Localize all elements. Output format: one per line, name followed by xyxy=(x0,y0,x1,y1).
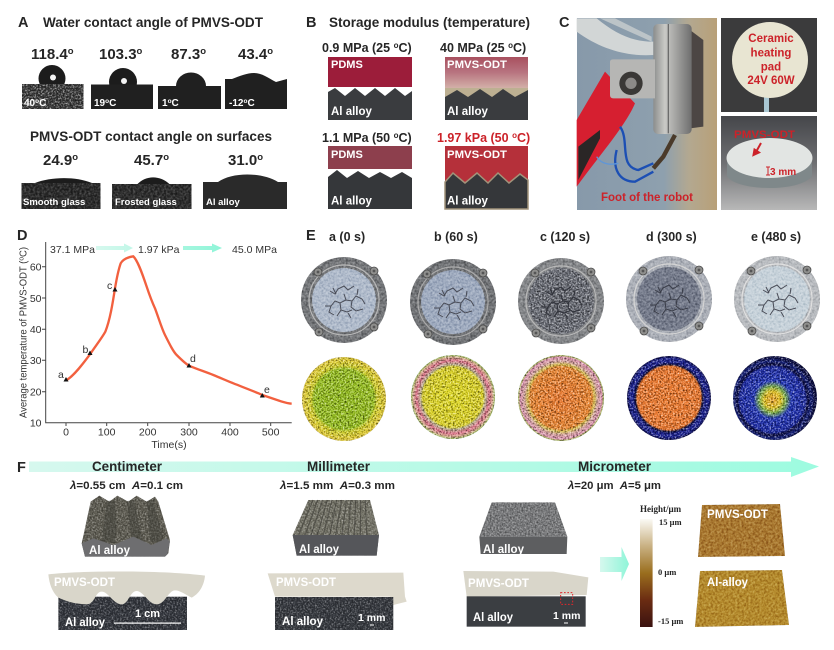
micrometer cross section: 1 mm xyxy=(553,610,580,622)
panel letter B: B xyxy=(306,15,316,31)
height colour bar: 15 μm xyxy=(659,517,682,527)
scale headings: Micrometer xyxy=(578,459,652,474)
thermal map e xyxy=(733,356,817,440)
panel D: temperature curve xyxy=(17,228,292,451)
contact angle values by temperature: 87.3 xyxy=(171,46,200,63)
droplet on frosted glass: Frosted glass xyxy=(115,197,177,208)
foot photo e xyxy=(734,256,820,342)
droplet image 1 C xyxy=(158,72,221,109)
droplet image 19 C: 19 xyxy=(94,98,105,109)
PMVS-ODT sample at 50 C xyxy=(437,131,530,209)
contact angle values by surface xyxy=(43,152,263,169)
line chart axes: 30 xyxy=(30,355,42,367)
micrometer cross section xyxy=(463,571,588,627)
droplet on frosted glass xyxy=(112,177,192,209)
panel F: multiscale surfaces xyxy=(17,457,819,630)
surface map PMVS-ODT: PMVS-ODT xyxy=(707,509,768,521)
centimeter block: Al alloy xyxy=(89,545,131,557)
droplet on Al alloy xyxy=(203,174,287,209)
height colour bar xyxy=(640,504,683,627)
contact angle values by temperature: 118.4 xyxy=(31,46,68,63)
PDMS sample at 50 C: C) xyxy=(398,131,412,145)
contact angle values by temperature: 103.3 xyxy=(99,46,137,63)
line chart axes: 60 xyxy=(30,262,42,274)
PMVS-ODT sample at 50 C: o xyxy=(512,131,517,140)
PDMS sample at 25 C: PDMS xyxy=(331,59,363,71)
contact angle values by temperature: o xyxy=(137,46,143,57)
PDMS sample at 50 C: o xyxy=(394,131,399,140)
thermal map c xyxy=(518,355,604,441)
foot photo d xyxy=(626,256,712,342)
line chart axes: C) xyxy=(18,247,30,257)
millimeter cross section xyxy=(268,573,407,630)
droplet image 1 C: C xyxy=(172,98,179,109)
data markers a to e: e xyxy=(264,384,270,396)
data markers a to e: c xyxy=(107,280,112,292)
photo: ceramic heating pad xyxy=(721,18,817,112)
millimeter block xyxy=(293,500,379,556)
micrometer cross section: Al alloy xyxy=(473,612,514,624)
photo: PMVS-ODT coated pad: 3 mm xyxy=(770,167,796,178)
foot photo b xyxy=(410,259,496,345)
PDMS sample at 50 C: 1.1 MPa (50 xyxy=(322,131,390,145)
time labels: a (0 s) xyxy=(329,230,365,244)
PMVS-ODT sample at 25 C: 40 MPa (25 xyxy=(440,41,505,55)
panel A: water contact angle xyxy=(18,15,287,209)
scale bar xyxy=(564,622,568,624)
heading: storage modulus: Storage modulus (temperature) xyxy=(329,15,530,30)
contact angle values by surface: 31.0 xyxy=(228,152,257,169)
modulus change annotations: 45.0 MPa xyxy=(232,244,277,256)
PDMS sample at 25 C xyxy=(322,41,412,120)
centimeter cross section: PMVS-ODT xyxy=(54,577,115,589)
wavelength and amplitude labels: λ=1.5 mm A=0.3 mm xyxy=(279,480,395,492)
droplet image 19 C: C xyxy=(109,98,116,109)
contact angle values by temperature: o xyxy=(267,46,273,57)
scale bar xyxy=(370,624,374,626)
line chart axes: 300 xyxy=(180,426,198,438)
panel letter D: D xyxy=(17,228,27,244)
arrow to surface maps xyxy=(600,547,629,581)
line chart axes xyxy=(18,242,292,451)
PMVS-ODT sample at 25 C: PMVS-ODT xyxy=(447,59,507,71)
wavelength and amplitude labels: λ=0.55 cm A=0.1 cm xyxy=(69,480,183,492)
heading: contact angle on surfaces: PMVS-ODT contact angle on surfaces xyxy=(30,129,272,144)
droplet image 40 C xyxy=(22,65,84,109)
line chart axes: 0 xyxy=(63,426,69,438)
contact angle values by temperature: 43.4 xyxy=(238,46,267,63)
data markers a to e xyxy=(58,280,270,398)
PMVS-ODT sample at 50 C: 1.97 kPa (50 xyxy=(437,131,509,145)
panel B: storage modulus xyxy=(306,15,530,209)
temperature curve xyxy=(66,256,292,404)
PMVS-ODT sample at 50 C: Al alloy xyxy=(447,196,489,208)
droplet image -12 C xyxy=(225,73,287,109)
line chart axes: 10 xyxy=(30,418,42,430)
panel letter C: C xyxy=(559,15,570,31)
modulus change annotations: 37.1 MPa xyxy=(50,244,95,256)
contact angle values by surface: 45.7 xyxy=(134,152,163,169)
PMVS-ODT sample at 25 C: o xyxy=(508,41,513,50)
scale bar xyxy=(114,622,181,624)
scale headings xyxy=(92,459,652,474)
contact angle values by temperature xyxy=(31,46,273,63)
height colour bar: -15 μm xyxy=(658,616,683,626)
surface map PMVS-ODT xyxy=(698,504,785,557)
panel letter E: E xyxy=(306,228,316,244)
PDMS sample at 25 C: C) xyxy=(398,41,412,55)
PDMS sample at 25 C: o xyxy=(394,41,399,50)
droplet image 1 C: o xyxy=(168,98,172,105)
line chart axes: 20 xyxy=(30,386,42,398)
photo: PMVS-ODT coated pad xyxy=(721,116,817,210)
photo: ceramic heating pad: Ceramic xyxy=(748,33,794,45)
centimeter cross section: 1 cm xyxy=(135,608,160,620)
line chart axes: 400 xyxy=(221,426,239,438)
droplet image 1 C: 1 xyxy=(162,98,168,109)
data markers a to e: a xyxy=(58,369,64,381)
droplet on smooth glass: Smooth glass xyxy=(23,197,85,208)
centimeter cross section xyxy=(48,571,205,630)
photo: PMVS-ODT coated pad: PMVS-ODT xyxy=(734,129,795,141)
millimeter cross section: Al alloy xyxy=(282,616,324,628)
micrometer block xyxy=(479,502,567,556)
panel letter F: F xyxy=(17,460,26,476)
PDMS sample at 50 C xyxy=(322,131,412,209)
time labels: d (300 s) xyxy=(646,230,697,244)
centimeter cross section: Al alloy xyxy=(65,617,106,629)
line chart axes: 50 xyxy=(30,293,42,305)
droplet image -12 C: C xyxy=(247,98,255,109)
micrometer block: Al alloy xyxy=(483,544,525,556)
contact angle values by surface: 24.9 xyxy=(43,152,72,169)
droplet image 19 C xyxy=(91,68,153,109)
contact angle values by temperature: o xyxy=(68,46,74,57)
droplet on smooth glass xyxy=(22,178,100,209)
line chart axes: Time(s) xyxy=(151,439,187,451)
time labels: b (60 s) xyxy=(434,230,478,244)
surface map Al alloy xyxy=(695,570,789,627)
panel C: foot and heating pad photos xyxy=(559,15,817,210)
droplet image 40 C: C xyxy=(39,98,46,109)
millimeter block: Al alloy xyxy=(299,544,340,556)
line chart axes: 500 xyxy=(262,426,280,438)
PMVS-ODT sample at 25 C: Al alloy xyxy=(447,106,489,118)
contact angle values by surface: o xyxy=(72,152,78,163)
red arrow xyxy=(754,143,761,155)
millimeter cross section: PMVS-ODT xyxy=(276,577,336,589)
droplet image 40 C: o xyxy=(35,98,39,105)
contact angle values by surface: o xyxy=(163,152,169,163)
micrometer cross section: PMVS-ODT xyxy=(468,578,529,590)
data markers a to e: d xyxy=(190,353,196,365)
PDMS sample at 50 C: PDMS xyxy=(331,149,363,161)
height colour bar: 0 μm xyxy=(658,567,676,577)
photo: ceramic heating pad: pad xyxy=(761,62,781,74)
time labels: c (120 s) xyxy=(540,230,590,244)
scale arrow band xyxy=(29,457,819,477)
thermal map a xyxy=(302,357,386,441)
scale headings: Centimeter xyxy=(92,459,163,474)
data markers a to e: b xyxy=(82,344,88,356)
foot photo a xyxy=(301,257,387,343)
photo: foot of the robot xyxy=(577,18,717,210)
photo: ceramic heating pad: heating xyxy=(751,48,791,60)
PMVS-ODT sample at 50 C: PMVS-ODT xyxy=(447,149,507,161)
droplet image -12 C: o xyxy=(243,98,247,105)
droplet on Al alloy: Al alloy xyxy=(206,197,241,208)
panel letter A: A xyxy=(18,15,29,31)
photo: foot of the robot: Foot of the robot xyxy=(601,192,693,204)
PDMS sample at 50 C: Al alloy xyxy=(331,196,373,208)
scale headings: Millimeter xyxy=(307,459,371,474)
line chart axes: Average temperature of PMVS-ODT ( xyxy=(18,252,30,418)
millimeter cross section: 1 mm xyxy=(358,612,385,624)
modulus change annotations: 1.97 kPa xyxy=(138,244,180,256)
line chart axes: 40 xyxy=(30,324,42,336)
height colour bar: Height/μm xyxy=(640,504,682,514)
centimeter block xyxy=(82,496,170,557)
thermal map b xyxy=(411,355,495,439)
wavelength and amplitude labels: λ=20 μm A=5 μm xyxy=(567,480,661,492)
time labels xyxy=(329,230,801,244)
heading: water contact angle: Water contact angle of PMVS-ODT xyxy=(43,15,264,30)
time labels: e (480 s) xyxy=(751,230,801,244)
droplet image 19 C: o xyxy=(105,98,109,105)
panel E: time series photos and thermal maps xyxy=(301,228,820,441)
photo: ceramic heating pad: 24V 60W xyxy=(747,75,795,87)
modulus change annotations xyxy=(50,244,277,256)
droplet image 40 C: 40 xyxy=(24,98,35,109)
PDMS sample at 25 C: Al alloy xyxy=(331,106,373,118)
PDMS sample at 25 C: 0.9 MPa (25 xyxy=(322,41,390,55)
surface map Al alloy: Al-alloy xyxy=(707,577,749,589)
PMVS-ODT sample at 25 C: C) xyxy=(513,41,526,55)
foot photo c xyxy=(518,258,604,344)
droplet image -12 C: -12 xyxy=(229,98,243,109)
contact angle values by temperature: o xyxy=(200,46,206,57)
contact angle values by surface: o xyxy=(257,152,263,163)
PMVS-ODT sample at 25 C xyxy=(440,41,528,120)
line chart axes: 100 xyxy=(98,426,116,438)
line chart axes: 200 xyxy=(139,426,157,438)
PMVS-ODT sample at 50 C: C) xyxy=(517,131,530,145)
thermal map d xyxy=(627,356,711,440)
wavelength and amplitude labels xyxy=(69,480,661,492)
line chart axes: o xyxy=(18,257,26,261)
